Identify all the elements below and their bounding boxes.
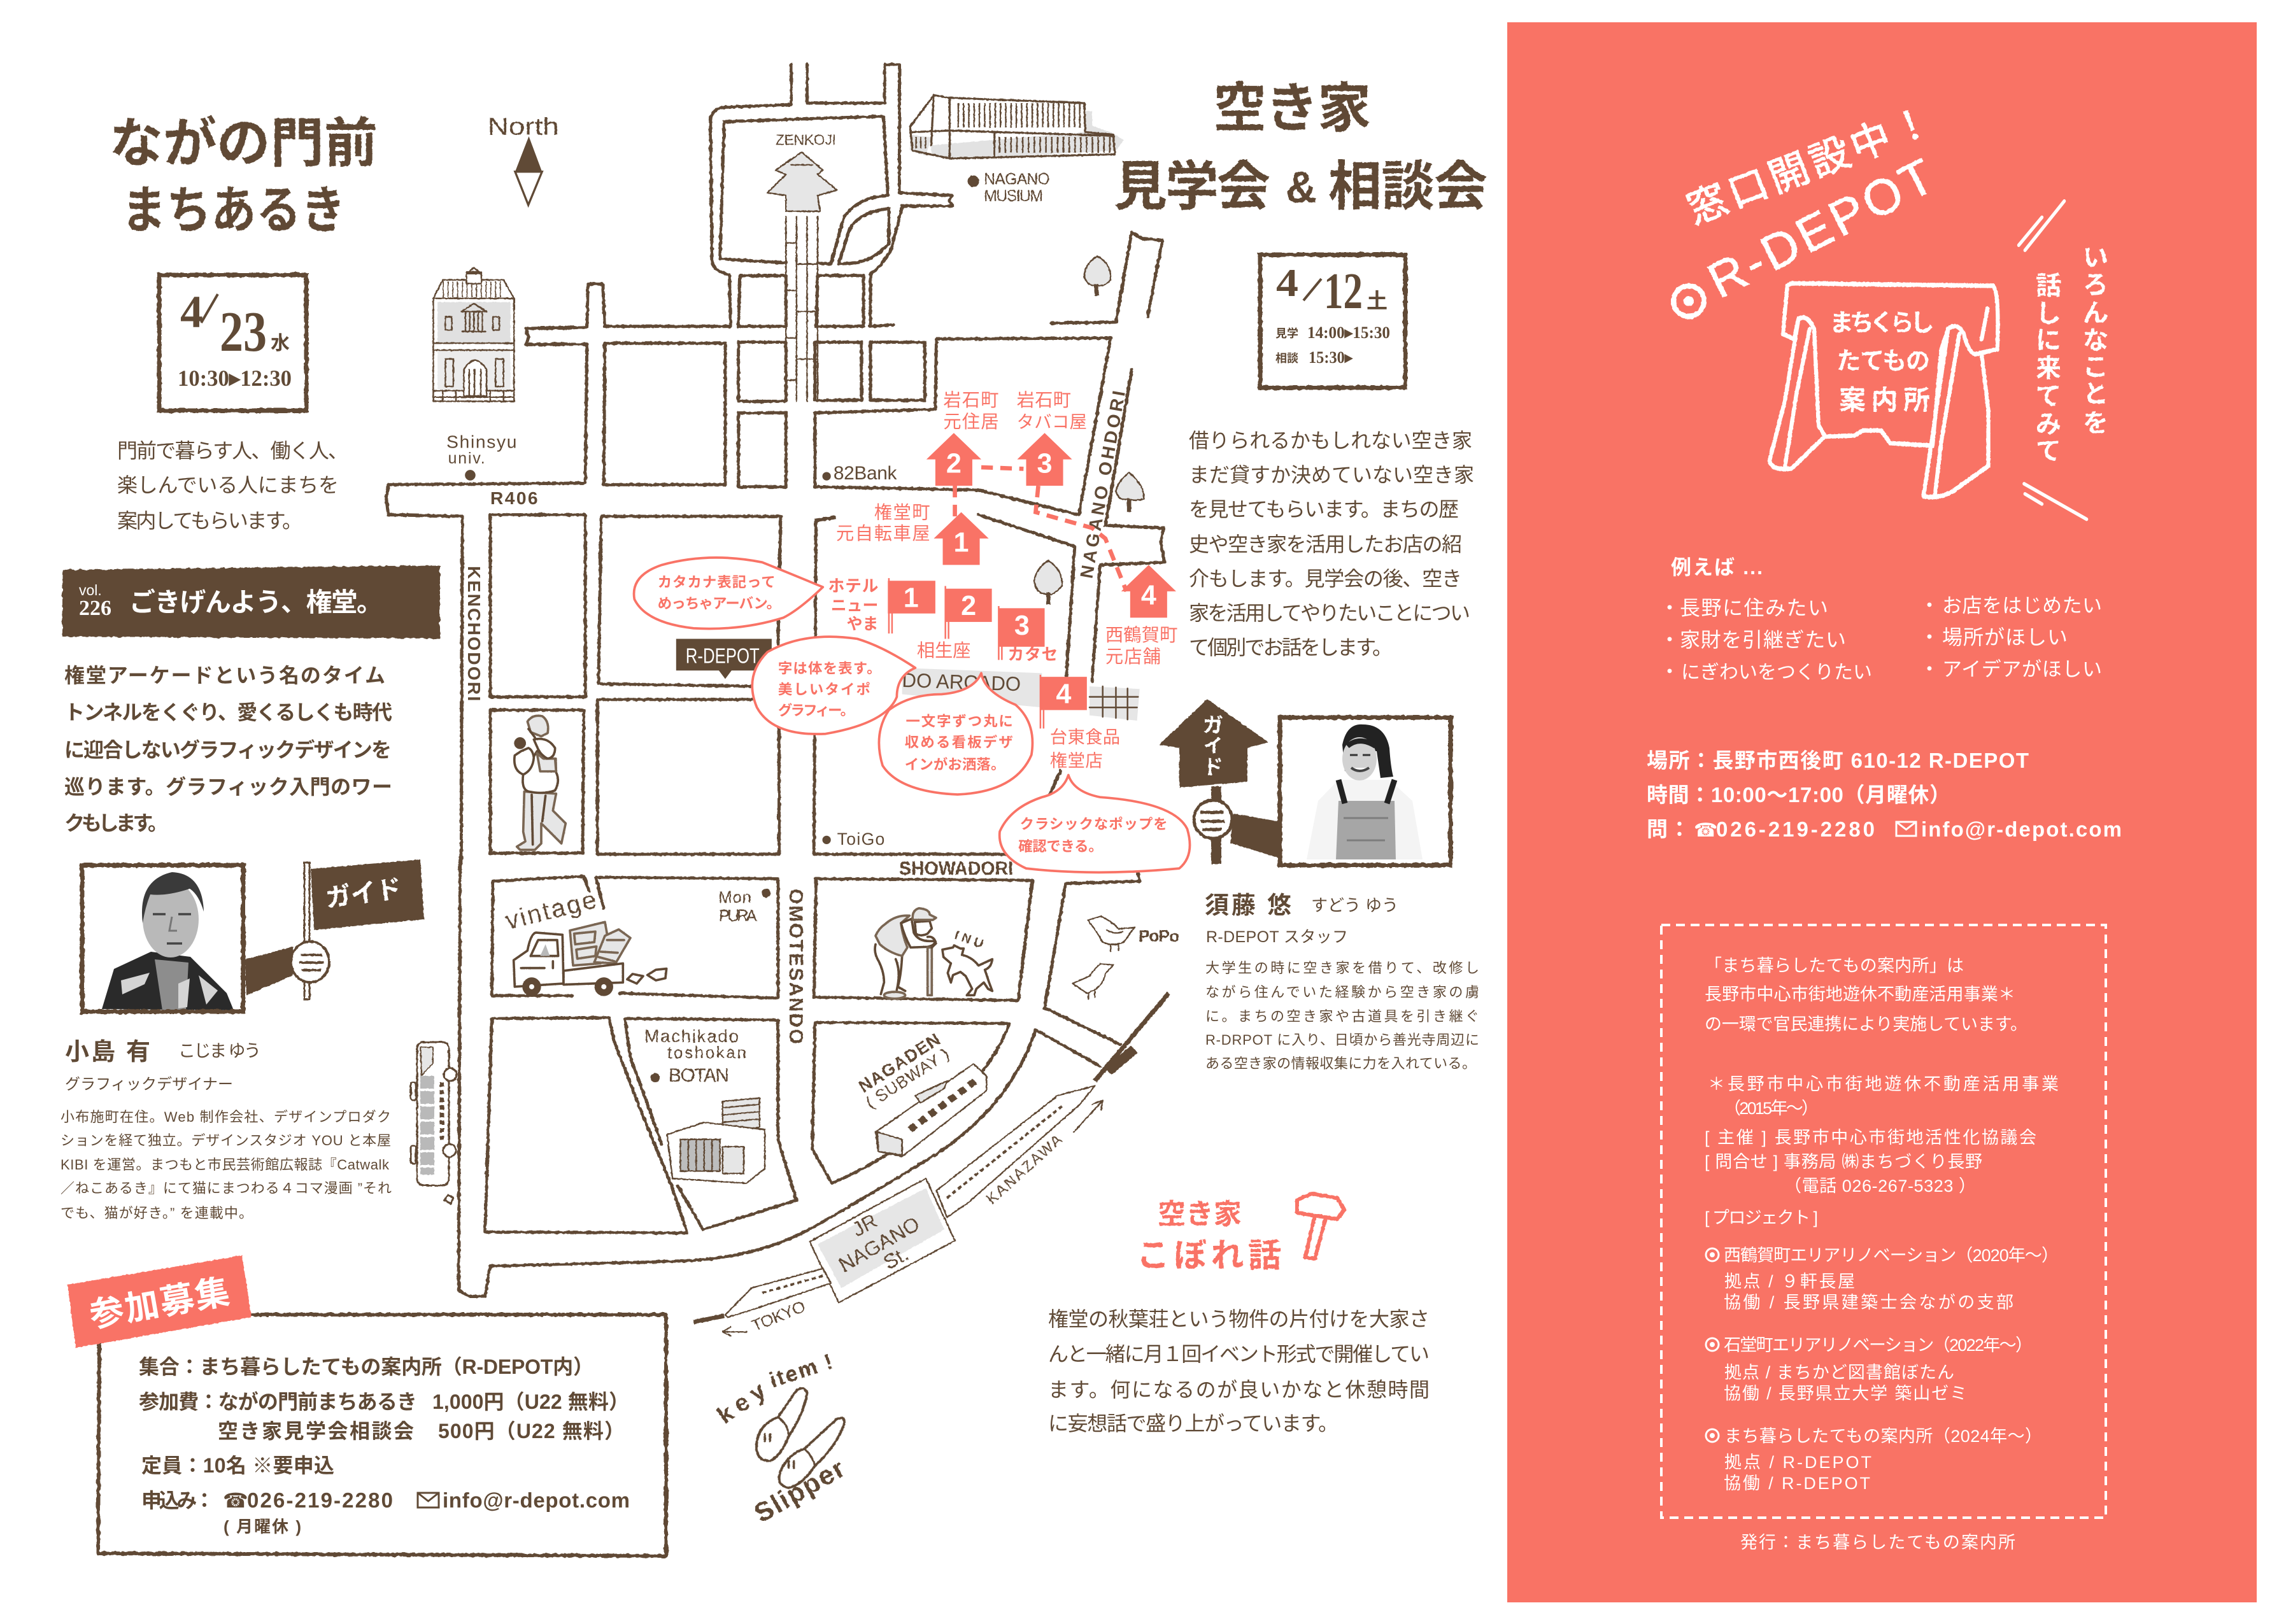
map labels: coral place names: 岩石町 — [943, 390, 998, 410]
map labels: Shinsyu, R406, Kenchodori: Shinsyu — [446, 431, 516, 451]
text: participation details: 参加費：ながの門前まちあるき — [139, 1390, 417, 1413]
map labels: 82 Bank, Nagano Ohdori, ToiGo: NAGANO OHDORI — [1076, 389, 1129, 580]
marker 3 — [1017, 433, 1072, 486]
accent strokes — [2019, 201, 2087, 519]
map labels: lower map hand lettering: SHOWADORI — [899, 858, 1013, 879]
guide profile: Sudo: 須藤 悠 — [1205, 893, 1291, 919]
flag 1 — [888, 578, 935, 633]
icon: mail — [418, 1493, 439, 1507]
flag 2: 2 — [961, 591, 976, 621]
arcade band and grid: DO ARCADO — [902, 668, 1021, 695]
icon: curtain sign — [1770, 283, 1998, 497]
illustration: Zenkoji temple and stone path: ZENKOJI — [776, 131, 836, 148]
marker 4: 4 — [1141, 581, 1156, 611]
map labels: coral place names: カタセ — [1007, 646, 1058, 664]
date box: April 12: 見学 — [1275, 327, 1298, 340]
box: project information: [ プロジェクト ] — [1705, 1208, 1818, 1227]
tag: R-DEPOT location: R-DEPOT — [686, 645, 760, 668]
guide profile: Sudo: ながら住んでいた経験から空き家の虜 — [1205, 984, 1479, 1000]
heading: consultation desk open at R-DEPOT — [1673, 99, 1943, 316]
text: participation details: 集合：まち暮らしたてもの案内所（R-DEPOT内） — [139, 1355, 593, 1378]
map labels: 82 Bank, Nagano Ohdori, ToiGo: 82Bank — [834, 463, 897, 484]
text: participation details: 申込み： — [141, 1489, 215, 1512]
map labels: lower map hand lettering: Mon — [718, 887, 751, 907]
text: publisher: 発行：まち暮らしたてもの案内所 — [1740, 1533, 2015, 1552]
speech bubbles: arcade comments — [634, 558, 1190, 872]
text: side story body: 権堂の秋葉荘という物件の片付けを大家さ — [1048, 1308, 1430, 1331]
icon: guide flag and hand: ガイド — [324, 875, 404, 913]
map labels: lower map hand lettering: PURA — [719, 906, 758, 925]
text: R-DEPOT contact information: info@r-depot.com — [1921, 817, 2122, 841]
box: project information: （電話 026-267-5323 ） — [1784, 1176, 1976, 1196]
illustration: old man and dog — [875, 908, 992, 999]
panel: coral right column background — [1507, 22, 2257, 1602]
map labels: coral place names: 西鶴賀町 — [1105, 625, 1177, 645]
illustration: Zenkoji temple and stone path — [767, 131, 837, 401]
bubble 3: インがお洒落。 — [905, 756, 1005, 772]
marker 3: 3 — [1037, 448, 1053, 479]
heading: vacant house tour and consultation: 空き家 — [1213, 78, 1371, 138]
text: participation details: ☎ — [223, 1488, 248, 1513]
guide profile: Sudo — [1205, 893, 1479, 1071]
text: participation details: 空き家見学会相談会 — [218, 1420, 414, 1443]
map labels: Shinsyu, R406, Kenchodori: KENCHODORI — [464, 566, 485, 701]
map labels: Shinsyu, R406, Kenchodori: univ. — [448, 449, 485, 467]
marker 2 — [927, 433, 981, 486]
date box: April 12: 相談 — [1275, 352, 1298, 365]
map labels: lower map hand lettering: Slipper — [749, 1453, 850, 1529]
map labels: lower map hand lettering: OMOTESANDO — [785, 889, 807, 1044]
heading: consultation desk open at R-DEPOT: 窓口開設中！ — [1681, 99, 1938, 232]
text: example list: にぎわいをつくりたい — [1681, 662, 1872, 683]
route: dashed path between houses — [955, 467, 1126, 591]
banner: vol. 226 heading: ごきげんよう、権堂。 — [129, 588, 383, 617]
icon: north arrow — [488, 113, 559, 205]
date box: April 12: 15:30▸ — [1309, 348, 1353, 367]
project 1 — [1706, 1246, 2059, 1312]
date box: April 12 — [1260, 255, 1405, 388]
markers: numbered shop flags — [888, 578, 1087, 728]
banner: vol. 226 heading: vol. — [79, 582, 102, 598]
map lower: roads and blocks — [458, 857, 1140, 1296]
map labels: coral place names: やま — [847, 616, 878, 633]
text: vacant house tour description: まだ貸すか決めていない空き家 — [1189, 463, 1474, 486]
illustration: Nagano museum: MUSIUM — [984, 187, 1043, 205]
text: participation details: 500円（U22 無料） — [438, 1420, 625, 1443]
project 2: 協働 / 長野県立大学 築山ゼミ — [1724, 1384, 1967, 1403]
box: project information: （2015年～） — [1724, 1099, 1819, 1118]
date box: April 23: 水 — [271, 333, 290, 354]
text: vacant house tour description: て個別でお話をします。 — [1189, 636, 1393, 659]
heading: vacant house tour and consultation: & — [1286, 162, 1317, 212]
text: arcade tour description: 権堂アーケードという名のタイム — [64, 664, 385, 687]
marker 1: 1 — [954, 528, 969, 558]
project 2 — [1706, 1336, 2033, 1403]
heading: vacant house tour and consultation: 相談会 — [1328, 157, 1487, 216]
map upper: roads and blocks — [387, 64, 1165, 863]
heading: consultation desk open at R-DEPOT: R-DEPOT — [1699, 148, 1943, 309]
text: example list: ・ — [1659, 597, 1680, 619]
text: example list: 例えば ... — [1671, 556, 1763, 579]
date box: April 23: 10:30▸12:30 — [178, 365, 292, 391]
frame — [82, 865, 243, 1012]
banner: participants wanted: 参加募集 — [87, 1273, 232, 1335]
flag 2 — [946, 586, 992, 639]
date box: April 23: 23 — [220, 300, 267, 364]
guide profile: Sudo: R-DEPOT スタッフ — [1206, 928, 1348, 946]
text: R-DEPOT contact information: 026-219-2280 — [1716, 817, 1875, 841]
guide profile: Sudo: R-DRPOT に入り、日頃から善光寺周辺に — [1205, 1032, 1479, 1048]
project 3: 協働 / R-DEPOT — [1724, 1474, 1870, 1493]
illustration: Shinshu university building — [433, 268, 514, 401]
bubble 1: めっちゃアーバン。 — [658, 595, 781, 611]
marker 4 — [1121, 565, 1176, 618]
map labels: lower map hand lettering: Machikado — [644, 1026, 739, 1046]
portrait — [102, 872, 234, 1010]
text: side story body: に妄想話で盛り上がっています。 — [1048, 1412, 1338, 1435]
text: example list: 場所がほしい — [1942, 626, 2068, 649]
bubble 4 — [1000, 775, 1190, 872]
icon: north arrow: North — [488, 113, 559, 141]
text: side story body — [1048, 1308, 1430, 1435]
text: vertical invitation: 話しに来てみて — [2036, 272, 2061, 465]
map labels: lower map hand lettering: key — [713, 1378, 770, 1429]
map labels: lower map hand lettering: NAGANO — [835, 1212, 923, 1276]
text: machi kurashi tatemono annaisho: たてもの — [1836, 348, 1930, 375]
text: arcade tour description: トンネルをくぐり、愛くるしくも時代 — [64, 701, 392, 724]
map labels: lower map hand lettering: BOTAN — [669, 1065, 729, 1086]
illustration: birds — [1072, 916, 1134, 999]
map labels: lower map hand lettering — [503, 858, 1179, 1529]
map labels: lower map hand lettering: item ! — [767, 1350, 835, 1393]
text: walking tour intro: 案内してもらいます。 — [117, 509, 302, 532]
heading: vacant house side stories: 空き家 — [1158, 1199, 1242, 1230]
bubble 2: 字は体を表す。 — [778, 660, 881, 676]
heading: vacant house side stories: こぼれ話 — [1137, 1238, 1281, 1274]
project 3: まち暮らしたてもの案内所（2024年～） — [1724, 1427, 2042, 1446]
icon: guide house sign and hand: イ — [1203, 736, 1223, 757]
text: vacant house tour description: 史や空き家を活用したお店の紹 — [1189, 533, 1462, 556]
text: arcade tour description — [64, 664, 392, 835]
box: project information: 「まち暮らしたてもの案内所」は — [1705, 956, 1964, 975]
text: example list: ・ — [1919, 658, 1940, 681]
map labels: coral place names: 相生座 — [917, 640, 970, 661]
banner: participants wanted — [67, 1255, 252, 1348]
markers: numbered empty houses — [927, 433, 1176, 618]
date box: April 12: 土 — [1367, 289, 1388, 313]
heading: vacant house tour and consultation: 見学会 — [1114, 157, 1270, 216]
marker 1 — [934, 512, 989, 565]
title: walking tour: ながの門前 — [110, 113, 378, 173]
guide profile: Kojima: でも、猫が好き。” を連載中。 — [60, 1205, 253, 1221]
map labels: coral place names: 台東食品 — [1050, 727, 1120, 747]
map labels: lower map hand lettering: TOKYO — [749, 1297, 808, 1336]
marker 2: 2 — [946, 448, 962, 479]
icon: guide house sign and hand: ガ — [1203, 714, 1223, 737]
map labels: Shinsyu, R406, Kenchodori: R406 — [490, 488, 538, 508]
project 1: 拠点 / ９軒長屋 — [1724, 1272, 1855, 1291]
project 2: 石堂町エリアリノベーション（2022年～） — [1724, 1336, 2033, 1355]
bubble 1 — [634, 558, 823, 629]
text: example list: ・ — [1659, 660, 1680, 683]
guide profile: Kojima: 小島 有 — [65, 1039, 150, 1066]
bubble 3 — [879, 673, 1032, 794]
text: R-DEPOT contact information: 場所：長野市西後町 610-12 R-DEPOT — [1647, 749, 2029, 772]
bubble 2 — [752, 637, 915, 734]
guide profile: Kojima: ／ねこあるき』にて猫にまつわる４コマ漫画 ”それ — [60, 1180, 392, 1196]
map labels: coral place names: 元住居 — [943, 411, 998, 432]
flag 1: 1 — [904, 583, 919, 614]
text: example list: 長野に住みたい — [1680, 597, 1828, 619]
bubble 3: 一文字ずつ丸に — [905, 713, 1013, 729]
arcade band and grid — [902, 668, 1140, 721]
box: project information: ＊長野市中心市街地遊休不動産活用事業 — [1708, 1075, 2059, 1094]
map labels: coral place names: 権堂町 — [874, 502, 930, 522]
project 3 — [1706, 1427, 2042, 1493]
map labels: coral place names: 元自転車屋 — [836, 523, 930, 544]
heading: vacant house side stories — [1137, 1199, 1281, 1274]
project 2: 拠点 / まちかど図書館ぼたん — [1724, 1363, 1954, 1382]
guide profile: Kojima: こじま ゆう — [178, 1041, 261, 1061]
bubble 1: カタカナ表記って — [658, 574, 776, 590]
map labels: lower map hand lettering: INU — [953, 928, 985, 951]
text: R-DEPOT contact information — [1647, 749, 2122, 842]
box: project information: [ 主催 ] 長野市中心市街地活性化協議会 — [1705, 1128, 2036, 1147]
text: arcade tour description: 巡ります。グラフィック入門のワー — [64, 775, 392, 798]
text: participation details: 026-219-2280 — [247, 1488, 393, 1512]
text: vacant house tour description: 介もします。見学会の後、空き — [1189, 567, 1462, 590]
map labels: lower map hand lettering: St. — [879, 1242, 912, 1274]
map labels: lower map hand lettering: vintage — [503, 886, 599, 935]
heading: vacant house tour and consultation — [1114, 78, 1487, 216]
map labels: lower map hand lettering: NAGADEN — [855, 1029, 944, 1096]
illustration: vintage truck — [514, 922, 667, 996]
map labels: coral place names: 権堂店 — [1050, 751, 1103, 770]
text: example list: ・ — [1919, 626, 1940, 649]
guide profile: Sudo: ある空き家の情報収集に力を入れている。 — [1205, 1056, 1476, 1071]
icon: guide flag and hand — [245, 859, 424, 999]
text: R-DEPOT contact information: ☎ — [1694, 819, 1717, 842]
text: arcade tour description: クもします。 — [64, 812, 168, 835]
text: vertical invitation: いろんなことを — [2083, 244, 2108, 437]
photo: guide Kojima — [82, 865, 243, 1012]
guide profile: Kojima: KIBI を運営。まつもと市民芸術館広報誌『Catwalk — [60, 1157, 390, 1173]
text: walking tour intro: 楽しんでいる人にまちを — [117, 474, 339, 497]
bubble 4: クラシックなポップを — [1020, 816, 1168, 832]
text: example list: ・ — [1659, 628, 1680, 651]
map labels: 82 Bank, Nagano Ohdori, ToiGo: ToiGo — [837, 830, 884, 849]
map labels: coral place names: 元店舗 — [1105, 646, 1161, 667]
map labels: 82 Bank, Nagano Ohdori, ToiGo — [822, 389, 1129, 849]
flag 4: 4 — [1056, 679, 1071, 710]
flag 4 — [1040, 675, 1087, 728]
map labels: coral place names: タバコ屋 — [1017, 412, 1087, 432]
text: example list: アイデアがほしい — [1942, 658, 2102, 681]
title: walking tour — [110, 113, 378, 239]
box: project information: [ 問合せ ] 事務局 ㈱まちづくり長野 — [1705, 1152, 1982, 1171]
map labels: coral place names: ホテル — [828, 577, 878, 595]
date box: April 23: 4 — [180, 286, 203, 337]
text: vacant house tour description: 借りられるかもしれない空き家 — [1189, 429, 1472, 452]
box: project information — [1661, 925, 2106, 1518]
text: walking tour intro: 門前で暮らす人、働く人、 — [117, 439, 348, 462]
guide profile: Kojima — [60, 1039, 392, 1221]
bubble 4: 確認できる。 — [1018, 838, 1103, 854]
map labels: lower map hand lettering: KANAZAWA — [983, 1131, 1065, 1208]
text: vacant house tour description — [1189, 429, 1474, 659]
guide profile: Kojima: 小布施町在住。Web 制作会社、デザインプロダク — [60, 1109, 391, 1125]
text: machi kurashi tatemono annaisho — [1829, 310, 1935, 415]
box: participation details frame — [98, 1315, 666, 1556]
trees — [1034, 256, 1144, 605]
text: machi kurashi tatemono annaisho: 案内所 — [1839, 385, 1930, 415]
project 1: 西鶴賀町エリアリノベーション（2020年～） — [1724, 1246, 2059, 1265]
map labels: lower map hand lettering: ( SUBWAY ) — [862, 1044, 953, 1112]
project 3: 拠点 / R-DEPOT — [1724, 1453, 1871, 1472]
bubble 2: 美しいタイポ — [778, 682, 870, 698]
illustration: books at Machikado — [667, 1098, 765, 1183]
map labels: coral place names — [828, 390, 1177, 770]
text: walking tour intro — [117, 439, 348, 532]
box: project information: 長野市中心市街地遊休不動産活用事業＊ — [1705, 985, 2015, 1004]
guide profile: Kojima: ションを経て独立。デザインスタジオ YOU と本屋 — [60, 1133, 391, 1148]
tag: R-DEPOT location — [676, 639, 772, 679]
text: vacant house tour description: 家を活用してやりたいことについ — [1189, 602, 1470, 625]
date box: April 23 — [159, 275, 306, 411]
map labels: lower map hand lettering: JR — [848, 1209, 881, 1241]
photo: guide Sudo — [1280, 717, 1451, 865]
box: project information: の一環で官民連携により実施しています。 — [1705, 1015, 2027, 1034]
frame — [1280, 717, 1451, 865]
text: example list — [1659, 556, 2102, 683]
text: vertical invitation — [2036, 244, 2108, 465]
guide profile: Kojima: グラフィックデザイナー — [65, 1076, 233, 1093]
text: example list: 家財を引継ぎたい — [1680, 628, 1846, 651]
text: R-DEPOT contact information: 問： — [1647, 817, 1690, 841]
date box: April 12: 14:00▸15:30 — [1307, 323, 1390, 342]
icon: guide house sign and hand: ド — [1203, 756, 1223, 779]
text: participation details — [139, 1355, 630, 1536]
flag 3 — [998, 606, 1045, 660]
illustration: key item slippers — [756, 1388, 844, 1488]
guide profile: Sudo: 大学生の時に空き家を借りて、改修し — [1205, 960, 1479, 976]
portrait — [1307, 724, 1423, 859]
flag 3: 3 — [1014, 611, 1030, 641]
icon: hammer — [1297, 1194, 1344, 1259]
map labels: Shinsyu, R406, Kenchodori — [446, 431, 538, 701]
guide profile: Sudo: に。まちの空き家や古道具を引き継ぐ — [1205, 1008, 1479, 1024]
illustration: Nagano museum: NAGANO — [984, 171, 1050, 188]
text: R-DEPOT contact information: 時間：10:00～17:00（月曜休） — [1647, 783, 1950, 807]
guide profile: Sudo: すどう ゆう — [1311, 896, 1398, 915]
map labels: coral place names: 岩石町 — [1017, 390, 1071, 410]
icon: mail — [1896, 822, 1916, 836]
text: participation details: 定員：10名 ※要申込 — [141, 1454, 334, 1477]
text: arcade tour description: に迎合しないグラフィックデザインを — [64, 738, 392, 761]
text: side story body: んと一緒に月１回イベント形式で開催してい — [1048, 1343, 1430, 1366]
illustration: sightseeing bus — [411, 1042, 457, 1204]
illustration: Nagano museum — [910, 95, 1124, 205]
text: side story body: ます。何になるのが良いかなと休憩時間 — [1048, 1378, 1430, 1401]
text: machi kurashi tatemono annaisho: まちくらし — [1829, 310, 1935, 337]
banner: vol. 226 heading: 226 — [79, 597, 111, 620]
text: example list: お店をはじめたい — [1942, 595, 2102, 617]
date box: April 12: 12 — [1324, 264, 1363, 320]
illustration: walking person — [514, 716, 565, 850]
icon: guide house sign and hand — [1159, 699, 1281, 864]
title: walking tour: まちあるき — [122, 182, 346, 239]
text: participation details: ( 月曜休 ) — [224, 1517, 301, 1536]
map labels: lower map hand lettering: PoPo — [1139, 926, 1179, 945]
text: vacant house tour description: を見せてもらいます。まちの歴 — [1189, 498, 1459, 521]
illustration: Nagaden train — [876, 1064, 986, 1157]
project 1: 協働 / 長野県建築士会ながの支部 — [1724, 1293, 2013, 1312]
text: participation details: info@r-depot.com — [443, 1488, 630, 1512]
date box: April 12: 4 — [1276, 262, 1298, 305]
bubble 2: グラフィー。 — [778, 702, 855, 719]
map labels: coral place names: ニュー — [831, 597, 878, 615]
text: participation details: 1,000円（U22 無料） — [432, 1390, 629, 1413]
banner: vol. 226 heading — [62, 565, 440, 639]
map labels: lower map hand lettering: toshokan — [667, 1043, 746, 1062]
text: example list: ・ — [1919, 594, 1940, 617]
bubble 3: 収める看板デザ — [905, 733, 1013, 750]
illustration: JR station and trains — [693, 993, 1168, 1336]
